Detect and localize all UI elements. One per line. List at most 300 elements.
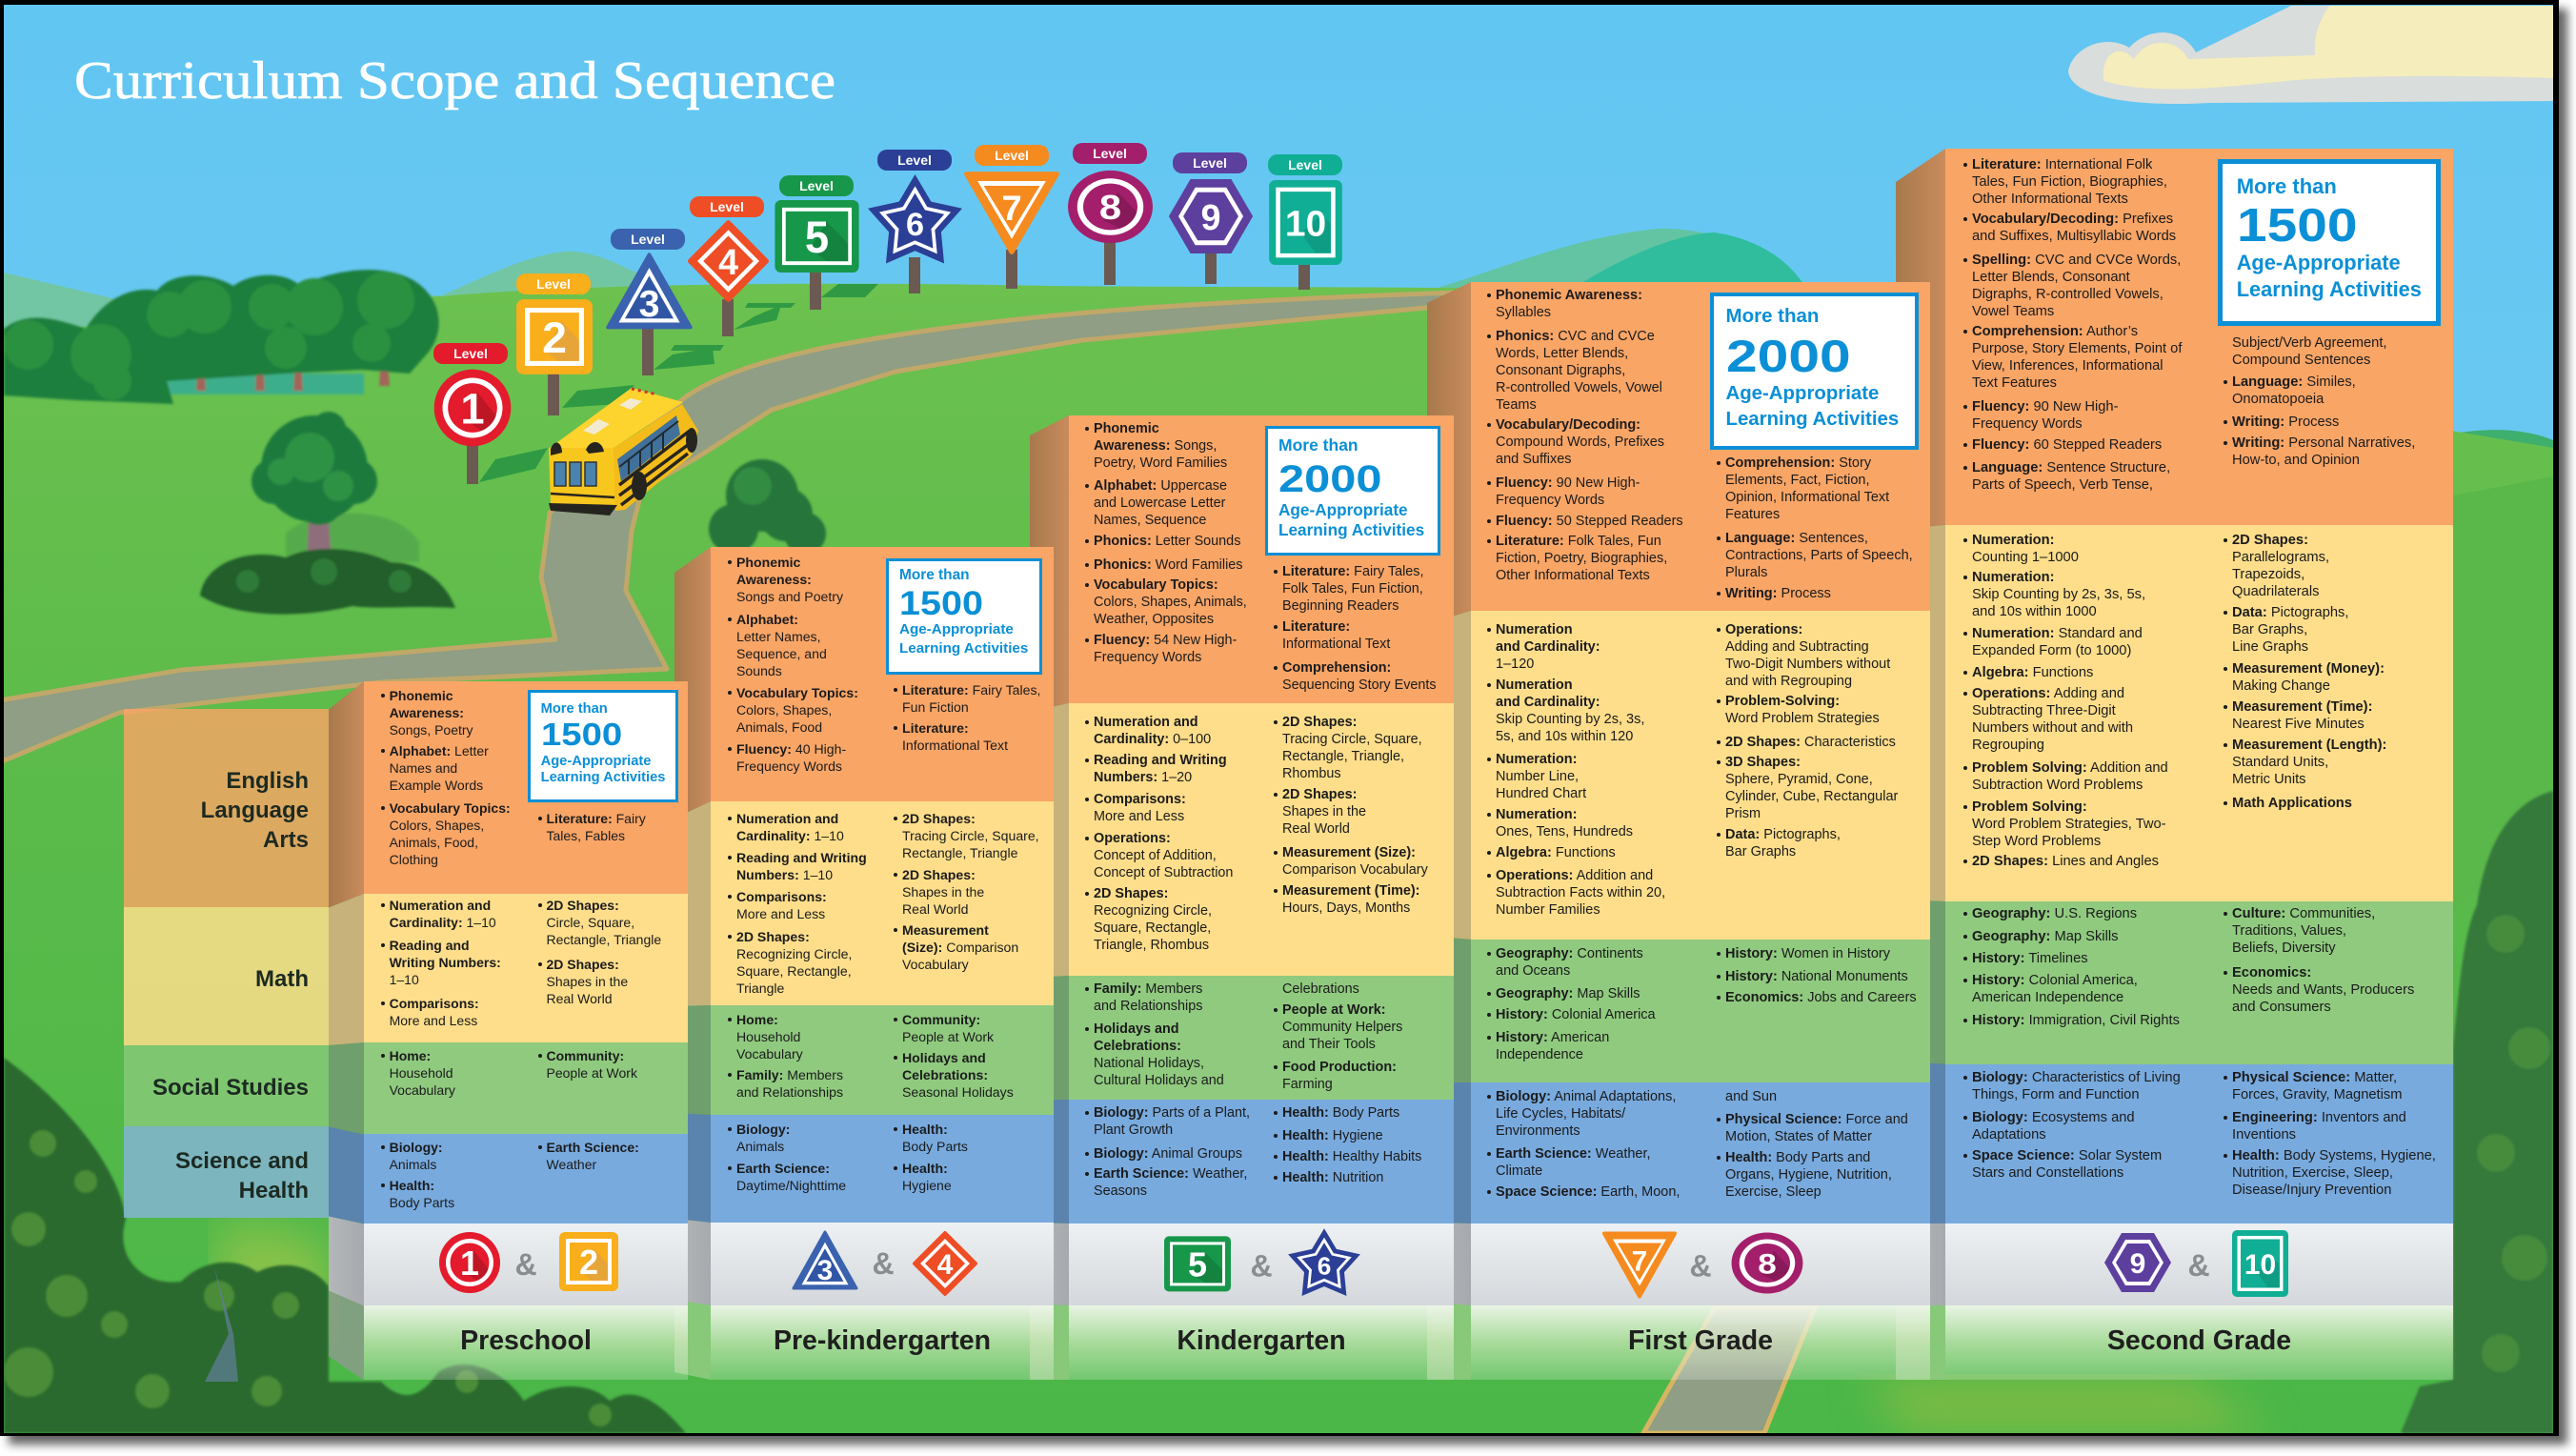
- text: second grade math right: Math Applications: [2232, 796, 2352, 811]
- level 4 sign: Level: [710, 199, 744, 214]
- level 1 sign: Level: [453, 346, 488, 361]
- text: second grade math right: Metric Units: [2232, 772, 2306, 787]
- text: first grade math right: Data: Pictographs,: [1725, 827, 1841, 842]
- text: kindergarten science right: Health: Body Parts: [1282, 1105, 1399, 1121]
- panel: first grade Science and Health: [1471, 1082, 1930, 1223]
- level badges: 7 and 8: &: [1689, 1248, 1712, 1283]
- text: pre-k math right: Real World: [902, 901, 968, 917]
- text: first grade science right: Organs, Hygiene, Nutrition,: [1725, 1167, 1892, 1183]
- text: pre-k math left: Comparisons:: [736, 889, 827, 904]
- text: first grade ELA left: and Suffixes: [1496, 452, 1572, 467]
- subject: Science and Health: Health: [239, 1178, 309, 1203]
- text: kindergarten social studies right: [1274, 981, 1402, 1092]
- level badges: 3 and 4: 4: [937, 1249, 954, 1281]
- grade label: First Grade: First Grade: [1628, 1325, 1773, 1356]
- pre-kindergarten block side wall: [674, 547, 711, 1380]
- text: second grade math right: Line Graphs: [2232, 638, 2308, 654]
- winding road: [0, 292, 1486, 762]
- callout: 2000 activities: Learning Activities: [1726, 409, 1899, 430]
- text: second grade math left: [1963, 532, 2168, 869]
- text: first grade social studies left: Independence: [1496, 1047, 1583, 1062]
- subject: Social Studies: [124, 1045, 329, 1126]
- level badges: 7 and 8: [1471, 1223, 1930, 1305]
- callout: 1500 activities: 1500: [899, 585, 983, 622]
- callout: 2000 activities: 2000: [1726, 331, 1850, 381]
- text: first grade math left: Subtraction Facts within 20,: [1496, 885, 1665, 900]
- text: kindergarten math left: Numeration and: [1094, 715, 1198, 730]
- text: second grade science right: [2224, 1070, 2436, 1198]
- level 9 sign: Level: [1193, 155, 1227, 171]
- text: kindergarten math right: Shapes in the: [1282, 804, 1366, 819]
- text: first grade ELA left: Phonics: CVC and CVCe: [1496, 328, 1655, 343]
- text: kindergarten math right: Real World: [1282, 821, 1350, 837]
- text: second grade ELA right: Onomatopoeia: [2232, 392, 2324, 407]
- text: first grade math left: Number Families: [1496, 902, 1600, 918]
- text: preschool ELA right: Tales, Fables: [547, 827, 625, 842]
- text: second grade math right: Standard Units,: [2232, 755, 2328, 770]
- text: preschool ELA left: Phonemic: [390, 688, 453, 703]
- text: first grade ELA left: Words, Letter Blends,: [1496, 345, 1628, 360]
- text: pre-k math left: Numbers: 1–10: [736, 867, 833, 882]
- text: kindergarten math left: 2D Shapes:: [1094, 886, 1168, 901]
- text: first grade math right: 3D Shapes:: [1725, 755, 1801, 770]
- text: kindergarten ELA left: and Lowercase Letter: [1094, 495, 1225, 511]
- text: kindergarten ELA right: Informational Text: [1282, 637, 1390, 652]
- text: kindergarten math right: [1274, 715, 1428, 916]
- text: pre-k math left: Recognizing Circle,: [736, 945, 852, 961]
- text: kindergarten science left: [1085, 1105, 1250, 1199]
- text: kindergarten ELA right: Literature: Fairy Tales,: [1282, 564, 1423, 579]
- text: second grade social studies left: History: Timelines: [1972, 951, 2088, 966]
- text: kindergarten ELA left: Vocabulary Topics:: [1094, 577, 1218, 593]
- text: pre-k social studies right: [894, 1012, 1014, 1100]
- text: pre-k math left: Square, Rectangle,: [736, 962, 852, 978]
- text: pre-k math right: 2D Shapes:: [902, 810, 976, 825]
- text: kindergarten ELA left: Weather, Opposites: [1094, 612, 1214, 627]
- text: first grade ELA left: Fiction, Poetry, Biographies,: [1496, 551, 1667, 566]
- text: first grade math right: Prism: [1725, 806, 1761, 821]
- text: kindergarten ELA left: Frequency Words: [1094, 650, 1201, 665]
- text: preschool ELA right: Literature: Fairy: [547, 810, 646, 825]
- text: pre-k ELA left: Songs and Poetry: [736, 589, 843, 604]
- text: second grade ELA left: Other Informational Texts: [1972, 192, 2128, 207]
- panel: kindergarten Science and Health: [1069, 1100, 1454, 1223]
- level badges: 9 and 10: &: [2187, 1248, 2210, 1283]
- text: pre-k social studies left: Vocabulary: [736, 1046, 803, 1062]
- text: kindergarten science left: Plant Growth: [1094, 1122, 1173, 1138]
- panel: second grade Science and Health: [1945, 1063, 2453, 1223]
- text: second grade social studies right: Economics:: [2232, 965, 2311, 981]
- panel: kindergarten Math: [1069, 703, 1454, 976]
- text: second grade ELA left: Parts of Speech, Verb Tense,: [1972, 476, 2153, 492]
- text: preschool social studies left: [390, 1042, 528, 1134]
- text: pre-k science right: Health:: [902, 1161, 948, 1176]
- level badges: 5 and 6: [1069, 1223, 1454, 1305]
- text: first grade ELA right: Features: [1725, 507, 1780, 522]
- callout: 1500 activities: Learning Activities: [541, 770, 665, 785]
- callout: 1500 activities: Age-Appropriate: [899, 621, 1014, 637]
- level 5 sign: 5: [805, 212, 829, 262]
- text: kindergarten math left: Recognizing Circle,: [1094, 903, 1212, 919]
- text: pre-k ELA left: Letter Names,: [736, 629, 821, 644]
- text: preschool ELA left: [381, 688, 511, 867]
- text: pre-k social studies left: and Relationships: [736, 1084, 843, 1100]
- text: preschool math left: Numeration and: [390, 898, 491, 913]
- text: first grade math left: Operations: Addition and: [1496, 868, 1653, 883]
- level 7 sign: Level: [995, 148, 1029, 163]
- text: first grade math left: and Cardinality:: [1496, 695, 1600, 710]
- text: second grade social studies right: Culture: Communities,: [2232, 906, 2375, 921]
- level badges: 5 and 6: &: [1250, 1248, 1273, 1283]
- text: first grade science left: Biology: Animal Adaptations,: [1496, 1089, 1676, 1104]
- text: pre-k social studies left: Home:: [736, 1012, 778, 1027]
- text: preschool math right: Circle, Square,: [547, 915, 634, 930]
- text: first grade science right: Motion, States of Matter: [1725, 1129, 1872, 1144]
- text: kindergarten ELA left: Phonemic: [1094, 421, 1159, 436]
- text: kindergarten ELA right: Folk Tales, Fun Fiction,: [1282, 581, 1423, 597]
- level 10 sign: 10: [1285, 204, 1326, 244]
- text: kindergarten math left: Reading and Writing: [1094, 753, 1227, 768]
- level 2 sign: 2: [542, 313, 567, 362]
- text: second grade math left: Algebra: Functions: [1972, 665, 2093, 680]
- text: second grade math right: Bar Graphs,: [2232, 621, 2307, 637]
- text: kindergarten social studies left: Holidays and: [1094, 1021, 1179, 1037]
- level 10 sign: Level: [1288, 157, 1322, 172]
- text: first grade science right: Health: Body Parts and: [1725, 1150, 1870, 1165]
- level 1 sign: [433, 343, 511, 484]
- text: kindergarten social studies left: Cultural Holidays and: [1094, 1073, 1224, 1088]
- level badges: 9 and 10: 10: [2244, 1249, 2276, 1281]
- text: pre-k math right: (Size): Comparison: [902, 940, 1018, 955]
- text: pre-k math right: 2D Shapes:: [902, 867, 976, 882]
- text: second grade math right: Parallelograms,: [2232, 549, 2329, 564]
- panel: second grade Social Studies: [1945, 901, 2453, 1063]
- text: pre-k ELA left: Vocabulary Topics:: [736, 684, 858, 699]
- text: first grade ELA left: Fluency: 50 Stepped Readers: [1496, 514, 1683, 529]
- text: preschool math right: Real World: [547, 991, 612, 1006]
- text: pre-k ELA left: Sounds: [736, 663, 782, 678]
- level 6 sign: 6: [906, 207, 924, 243]
- text: second grade math left: Numeration: Standard and: [1972, 625, 2143, 640]
- level badges: 5 and 6: 5: [1188, 1244, 1207, 1284]
- school bus: [549, 388, 698, 516]
- text: first grade math right: and with Regrouping: [1725, 673, 1852, 688]
- subject: English Language Arts: Language: [201, 797, 309, 823]
- text: second grade science right: Forces, Gravity, Magnetism: [2232, 1087, 2402, 1102]
- text: kindergarten science right: [1274, 1105, 1421, 1185]
- text: second grade math right: Quadrilaterals: [2232, 583, 2319, 598]
- text: first grade social studies left: and Oceans: [1496, 963, 1570, 979]
- text: preschool science left: Health:: [390, 1178, 434, 1193]
- level 1 sign: 1: [460, 384, 485, 433]
- text: first grade social studies left: History: Colonial America: [1496, 1007, 1656, 1022]
- text: second grade ELA right: Language: Similes,: [2232, 374, 2356, 390]
- text: second grade math right: Trapezoids,: [2232, 566, 2304, 581]
- text: first grade math left: 1–120: [1496, 656, 1534, 671]
- text: kindergarten ELA right: Beginning Readers: [1282, 598, 1399, 614]
- text: first grade social studies right: History: Women in History: [1725, 946, 1890, 961]
- text: second grade social studies left: American Independence: [1972, 990, 2123, 1005]
- text: second grade ELA left: Digraphs, R-controlled Vowels,: [1972, 287, 2163, 302]
- text: first grade math right: Operations:: [1725, 621, 1802, 637]
- text: pre-k social studies left: Household: [736, 1029, 800, 1044]
- level badges: 5 and 6: 6: [1318, 1251, 1331, 1280]
- text: first grade ELA right: Elements, Fact, Fiction,: [1725, 473, 1869, 488]
- text: preschool ELA left: Colors, Shapes,: [390, 818, 484, 833]
- panel: preschool English Language Arts: [364, 680, 688, 894]
- text: preschool social studies right: People at Work: [547, 1065, 637, 1081]
- subject: Science and Health: [124, 1126, 329, 1218]
- callout: 1500 activities: [886, 558, 1042, 675]
- text: second grade science right: Inventions: [2232, 1127, 2296, 1143]
- level 9 sign: 9: [1200, 198, 1221, 238]
- text: preschool social studies left: Home:: [390, 1048, 431, 1063]
- text: first grade science right: Exercise, Sleep: [1725, 1184, 1821, 1200]
- text: second grade math left: Numeration:: [1972, 532, 2054, 547]
- text: second grade ELA left: Frequency Words: [1972, 416, 2083, 432]
- text: pre-k ELA left: [728, 555, 858, 774]
- text: kindergarten math left: More and Less: [1094, 808, 1184, 823]
- grass ground: [0, 284, 2553, 1433]
- text: second grade social studies right: [2224, 906, 2414, 1015]
- text: second grade science left: Adaptations: [1972, 1127, 2046, 1143]
- text: second grade ELA left: Text Features: [1972, 375, 2057, 391]
- text: pre-k math right: Tracing Circle, Square,: [902, 827, 1039, 842]
- text: preschool math left: Writing Numbers:: [390, 955, 501, 970]
- text: kindergarten ELA left: Fluency: 54 New High-: [1094, 633, 1237, 648]
- text: pre-k ELA left: Colors, Shapes,: [736, 701, 832, 717]
- level 3 sign: 3: [639, 284, 659, 325]
- text: kindergarten math right: Measurement (Size):: [1282, 845, 1416, 860]
- panel: kindergarten Social Studies: [1069, 976, 1454, 1100]
- text: kindergarten social studies right: and Their Tools: [1282, 1037, 1376, 1052]
- text: second grade ELA right: Compound Sentences: [2232, 353, 2370, 368]
- text: preschool ELA left: Songs, Poetry: [390, 722, 473, 738]
- kindergarten block side wall: [1030, 415, 1069, 1380]
- level 8 sign: [1068, 143, 1153, 285]
- bush behind pre-kindergarten block: [709, 459, 826, 555]
- level badges: 3 and 4: [711, 1223, 1054, 1305]
- grade label: First Grade: [1471, 1305, 1930, 1380]
- text: pre-k ELA left: Sequence, and: [736, 646, 827, 661]
- text: pre-k math right: Shapes in the: [902, 884, 984, 900]
- level 3 sign: Level: [631, 232, 665, 247]
- text: kindergarten ELA left: Phonics: Word Families: [1094, 556, 1242, 572]
- text: first grade math left: Numeration:: [1496, 807, 1577, 822]
- text: second grade ELA right: [2224, 335, 2415, 467]
- text: second grade math left: Counting 1–1000: [1972, 549, 2079, 564]
- text: kindergarten social studies right: People at Work:: [1282, 1002, 1385, 1018]
- text: first grade math right: Two-Digit Numbers without: [1725, 656, 1890, 671]
- text: pre-k science right: Hygiene: [902, 1178, 952, 1193]
- text: second grade science right: Engineering: Inventors and: [2232, 1110, 2406, 1125]
- text: second grade math left: Problem Solving:: [1972, 799, 2087, 815]
- text: first grade ELA right: [1717, 455, 1913, 601]
- text: first grade science right: [1717, 1089, 1908, 1200]
- text: kindergarten math left: Concept of Subtraction: [1094, 865, 1233, 880]
- text: kindergarten math right: 2D Shapes:: [1282, 715, 1357, 730]
- panel: first grade Social Studies: [1471, 940, 1930, 1082]
- text: first grade science left: Environments: [1496, 1123, 1580, 1139]
- text: preschool math right: [547, 894, 680, 1042]
- panel: preschool Math: [364, 894, 688, 1042]
- text: first grade science left: [1487, 1089, 1680, 1200]
- callout: 1500 activities: More than: [2237, 174, 2337, 198]
- text: second grade ELA right: Subject/Verb Agreement,: [2232, 335, 2386, 351]
- text: kindergarten ELA left: Awareness: Songs,: [1094, 438, 1217, 454]
- panel: pre-kindergarten Math: [711, 801, 1054, 1005]
- text: kindergarten math left: Operations:: [1094, 831, 1171, 846]
- callout: 1500 activities: More than: [899, 567, 970, 583]
- grade label: Pre-kindergarten: [711, 1305, 1054, 1380]
- text: first grade ELA right: Contractions, Parts of Speech,: [1725, 547, 1913, 562]
- text: kindergarten ELA right: Sequencing Story Events: [1282, 677, 1437, 692]
- text: pre-k ELA left: Fluency: 40 High-: [736, 741, 846, 757]
- text: first grade math right: Problem-Solving:: [1725, 694, 1840, 709]
- text: preschool social studies right: Community:: [547, 1048, 624, 1063]
- text: second grade ELA left: Fluency: 90 New High-: [1972, 399, 2118, 415]
- text: first grade ELA right: Comprehension: Story: [1725, 455, 1871, 471]
- level 4 sign: 4: [718, 242, 738, 282]
- text: kindergarten social studies left: National Holidays,: [1094, 1056, 1204, 1071]
- grade label: Second Grade: Second Grade: [2107, 1325, 2291, 1356]
- text: pre-k math left: More and Less: [736, 906, 825, 921]
- text: pre-k ELA left: Frequency Words: [736, 758, 842, 774]
- callout: 1500 activities: 1500: [541, 717, 622, 751]
- text: second grade ELA left: Purpose, Story Elements, Point of: [1972, 341, 2182, 356]
- text: first grade math right: Word Problem Strategies: [1725, 711, 1880, 726]
- text: first grade math right: 2D Shapes: Characteristics: [1725, 735, 1896, 750]
- sky: [0, 0, 2576, 858]
- text: first grade social studies left: Geography: Continents: [1496, 946, 1643, 961]
- text: first grade math left: Number Line,: [1496, 769, 1579, 784]
- text: preschool social studies right: [547, 1042, 680, 1134]
- text: second grade social studies left: Geography: Map Skills: [1972, 929, 2118, 944]
- text: kindergarten social studies right: Food Production:: [1282, 1060, 1397, 1075]
- subject: Math: Math: [255, 966, 309, 991]
- text: preschool ELA left: Alphabet: Letter: [390, 743, 489, 758]
- text: kindergarten ELA left: [1085, 421, 1247, 665]
- text: second grade ELA right: Writing: Personal Narratives,: [2232, 435, 2415, 450]
- text: second grade math left: Problem Solving: Addition and: [1972, 760, 2168, 776]
- level 2 sign: Level: [536, 276, 571, 292]
- text: second grade math left: Step Word Problems: [1972, 834, 2101, 849]
- text: pre-k ELA left: Alphabet:: [736, 612, 798, 627]
- first grade block side wall: [1427, 282, 1471, 1380]
- text: first grade social studies right: Economics: Jobs and Careers: [1725, 990, 1917, 1005]
- text: kindergarten science left: Seasons: [1094, 1183, 1147, 1199]
- grade label: Pre-kindergarten: Pre-kindergarten: [774, 1325, 991, 1355]
- text: kindergarten social studies right: Community Helpers: [1282, 1020, 1402, 1035]
- level 2 sign: [516, 273, 593, 415]
- text: pre-k ELA left: Animals, Food: [736, 718, 822, 734]
- text: pre-k social studies right: Community:: [902, 1012, 980, 1027]
- text: kindergarten science left: Biology: Animal Groups: [1094, 1146, 1242, 1162]
- text: second grade science right: Disease/Injury Prevention: [2232, 1183, 2391, 1198]
- text: first grade science left: Space Science: Earth, Moon,: [1496, 1184, 1680, 1200]
- text: second grade math right: 2D Shapes:: [2232, 532, 2308, 547]
- level 6 sign: Level: [897, 152, 932, 168]
- subject: English Language Arts: English: [226, 768, 309, 793]
- text: second grade ELA left: Spelling: CVC and CVCe Words,: [1972, 253, 2181, 268]
- text: first grade ELA left: R-controlled Vowels, Vowel: [1496, 379, 1662, 394]
- text: preschool ELA left: Example Words: [390, 778, 483, 793]
- level 3 sign: [608, 229, 691, 375]
- text: kindergarten ELA right: Comprehension:: [1282, 659, 1391, 675]
- level badges: 1 and 2: 1: [460, 1244, 479, 1283]
- callout: 1500 activities: [2218, 158, 2441, 326]
- callout: 1500 activities: Age-Appropriate: [2237, 251, 2401, 274]
- text: second grade social studies right: Needs and Wants, Producers: [2232, 982, 2414, 998]
- grade label: Preschool: Preschool: [460, 1325, 592, 1356]
- text: second grade math right: Nearest Five Minutes: [2232, 717, 2365, 732]
- text: second grade ELA left: Comprehension: Author’s: [1972, 324, 2138, 339]
- sign shadows on the grass: [479, 284, 878, 482]
- subject: Science and Health: Science and: [175, 1147, 309, 1174]
- subject: English Language Arts: Arts: [263, 827, 309, 852]
- level 5 sign: [775, 175, 859, 310]
- text: second grade math left: and 10s within 1000: [1972, 604, 2097, 619]
- level 9 sign: [1169, 152, 1253, 284]
- text: kindergarten science left: Earth Science: Weather,: [1094, 1166, 1247, 1182]
- grade label: Kindergarten: [1069, 1305, 1454, 1380]
- text: second grade ELA left: and Suffixes, Multisyllabic Words: [1972, 229, 2176, 244]
- text: kindergarten social studies left: [1085, 981, 1224, 1088]
- text: second grade social studies left: Geography: U.S. Regions: [1972, 906, 2137, 921]
- callout: 2000 activities: Age-Appropriate: [1278, 500, 1408, 519]
- grade label: Kindergarten: Kindergarten: [1177, 1325, 1346, 1356]
- text: first grade math left: [1487, 621, 1665, 918]
- text: second grade math left: 2D Shapes: Lines and Angles: [1972, 854, 2159, 869]
- text: preschool math left: Comparisons:: [390, 995, 479, 1010]
- level badges: 7 and 8: 7: [1632, 1245, 1647, 1277]
- level badges: 3 and 4: 3: [817, 1255, 833, 1286]
- text: second grade science right: Health: Body Systems, Hygiene,: [2232, 1148, 2436, 1163]
- callout: 1500 activities: 1500: [2237, 200, 2357, 252]
- text: second grade science right: Nutrition, Exercise, Sleep,: [2232, 1165, 2393, 1181]
- callout: 2000 activities: [1265, 425, 1440, 556]
- text: pre-k science left: Biology:: [736, 1122, 790, 1137]
- text: preschool science left: Biology:: [390, 1140, 443, 1155]
- text: preschool ELA left: Vocabulary Topics:: [390, 800, 511, 816]
- text: preschool ELA left: Awareness:: [390, 705, 464, 720]
- text: preschool math left: 1–10: [390, 972, 419, 987]
- text: kindergarten math right: 2D Shapes:: [1282, 787, 1357, 802]
- text: second grade ELA left: Letter Blends, Consonant: [1972, 270, 2130, 285]
- text: preschool social studies left: Household: [390, 1065, 453, 1081]
- text: second grade science left: Things, Form and Function: [1972, 1087, 2140, 1102]
- text: pre-k science right: Body Parts: [902, 1139, 968, 1154]
- text: kindergarten ELA left: Names, Sequence: [1094, 513, 1206, 528]
- lone tree and bush: [200, 412, 455, 615]
- panel: pre-kindergarten Social Studies: [711, 1005, 1054, 1115]
- level badges: 7 and 8: 8: [1758, 1246, 1777, 1279]
- text: second grade social studies right: and Consumers: [2232, 1000, 2331, 1015]
- text: kindergarten math left: Numbers: 1–20: [1094, 770, 1192, 785]
- text: kindergarten math right: Rectangle, Triangle,: [1282, 749, 1404, 764]
- text: second grade science left: Space Science: Solar System: [1972, 1148, 2162, 1163]
- text: preschool math left: Reading and: [390, 938, 470, 953]
- callout: 2000 activities: More than: [1278, 435, 1358, 455]
- text: kindergarten ELA left: Poetry, Word Families: [1094, 455, 1227, 471]
- text: first grade science left: Life Cycles, Habitats/: [1496, 1106, 1625, 1122]
- text: second grade social studies left: History: Colonial America,: [1972, 973, 2138, 988]
- level 4 sign: [690, 196, 766, 336]
- text: second grade math left: Numeration:: [1972, 570, 2054, 585]
- text: second grade ELA left: Vocabulary/Decoding: Prefixes: [1972, 212, 2173, 227]
- tree line at back left: [4, 270, 439, 404]
- text: pre-k ELA right: Literature:: [902, 720, 969, 736]
